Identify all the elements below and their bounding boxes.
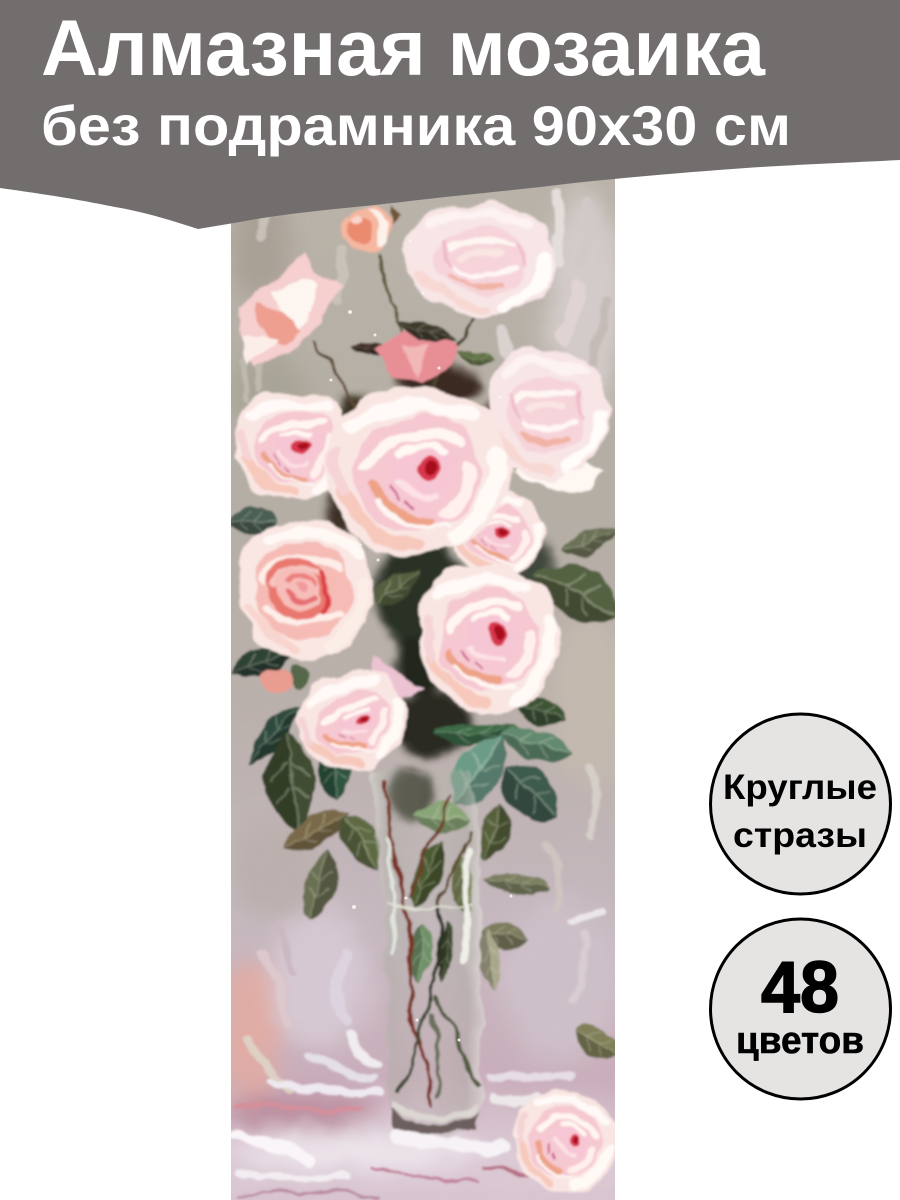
leaves [228,316,631,1070]
header banner [0,0,900,229]
rose: middle right [418,563,560,713]
subtitle: без подрамника 90х30 см [41,94,791,157]
painted background [231,178,615,1200]
rose: top [406,203,558,317]
rose: right [486,348,607,492]
rose: small right [451,492,544,574]
stems [310,255,478,420]
painting: roses in a glass vase [231,178,615,1200]
dark foliage behind the roses [326,363,553,821]
glass vase [371,770,481,1135]
rosebud: small lower left [262,666,307,690]
rose: back [374,330,460,385]
badge: 48 colours [710,919,890,1099]
foliage and stems inside the vase [384,780,478,1133]
rose: bud [341,205,400,253]
rose: fallen on table [512,1088,615,1193]
title: Алмазная мозаика [41,3,766,92]
badge: round rhinestones: стразы [733,816,867,855]
rose: middle left [238,520,374,660]
badge: round rhinestones: Круглые [723,768,877,807]
badge: round rhinestones [710,714,890,894]
badge: 48 colours: цветов [736,1020,864,1062]
rose: upper left [238,252,343,368]
badge: 48 colours: 48 [761,948,839,1028]
rose: centre [327,389,510,557]
water droplets [308,240,520,1042]
rose: lower [291,660,425,781]
rose: left [235,391,352,501]
painted scene [231,178,615,1200]
